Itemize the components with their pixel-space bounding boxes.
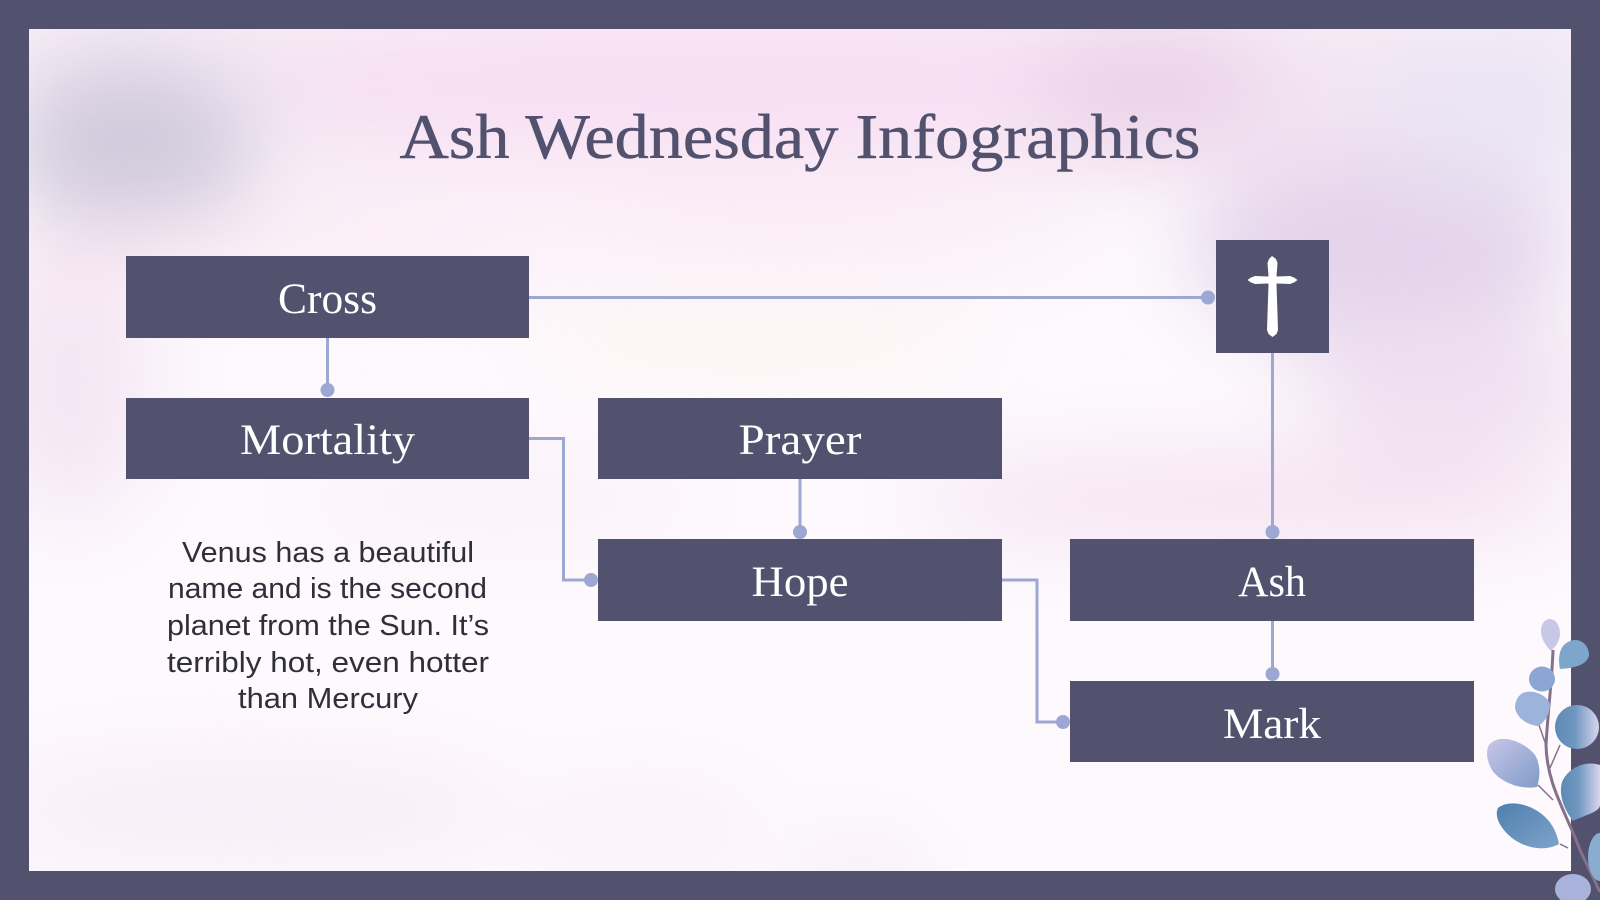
body text: than Mercury [238,683,419,715]
box: Mortality: Mortality [240,417,416,464]
box: Cross [126,256,529,338]
box: Ash [1070,539,1474,621]
icon: cross [1216,240,1329,353]
box: Ash: Ash [1238,559,1306,606]
connector dots [320,290,1280,729]
connector lines [328,298,1272,722]
body text: terribly hot, even hotter [167,647,489,679]
body text: Venus has a beautiful [182,537,474,569]
box: Hope: Hope [752,559,848,606]
body text: name and is the second [168,573,487,605]
box: Mark [1070,681,1474,762]
box: Hope [598,539,1002,621]
body text: planet from the Sun. It’s [167,610,489,642]
body text [167,537,489,715]
icon: eucalyptus branch [1487,619,1600,900]
box: Cross: Cross [278,276,377,323]
box: Prayer: Prayer [738,417,862,464]
box: Prayer [598,398,1002,479]
title: Ash Wednesday Infographics [400,101,1200,172]
box: Mark: Mark [1223,701,1322,748]
box: Mortality [126,398,529,479]
